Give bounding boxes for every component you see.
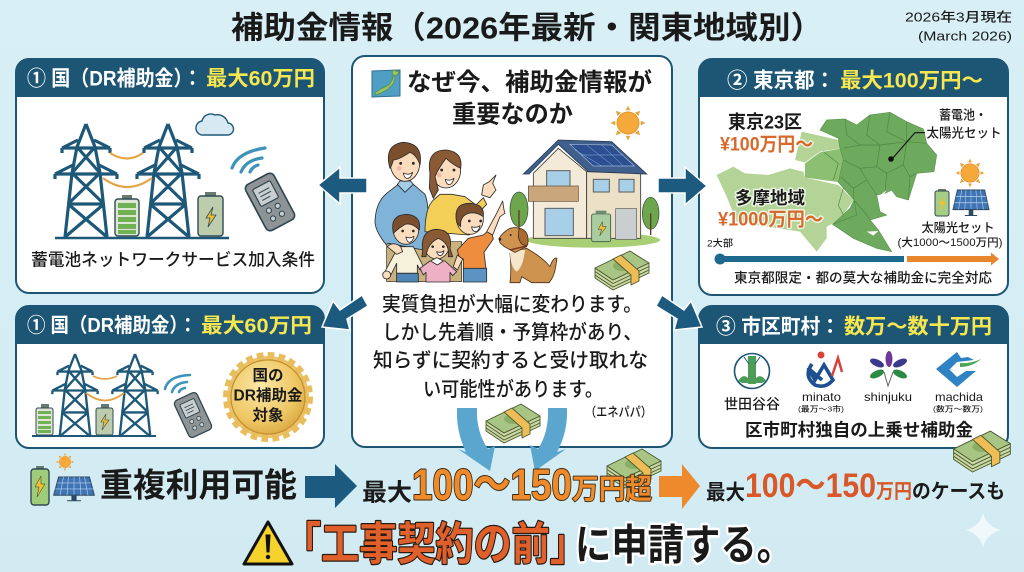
- label: Setagaya: 世田谷谷: [724, 396, 780, 412]
- arrow: center to national top: [318, 167, 367, 204]
- icon: power towers and batteries: [55, 124, 229, 238]
- icon: solar panel: [953, 190, 989, 216]
- text: apply: に申請する。: [575, 522, 793, 568]
- logo: Shinjuku: [869, 351, 908, 386]
- panel: national DR subsidy bottom: [16, 306, 324, 448]
- label: 2 wards: 2大部: [707, 238, 734, 250]
- labels: Tama: ¥1000万円〜: [718, 210, 823, 230]
- figure: mother: [425, 150, 496, 235]
- icon: warning triangle: [244, 522, 292, 564]
- illustration: dog: [499, 228, 557, 283]
- labels: 23 wards: ¥100万円〜: [720, 134, 813, 156]
- map: Tokyo: [717, 112, 937, 252]
- text block: explanation: 実質負担が大幅に変わります。: [382, 293, 642, 316]
- arrow: left curved flow: [457, 408, 495, 471]
- heading: why now: なぜ今、補助金情報が: [407, 68, 652, 96]
- source note: （エネパパ）: [585, 404, 652, 420]
- icon: small towers and batteries: [32, 354, 158, 436]
- text: combined use: 重複利用可能: [100, 466, 297, 504]
- figure: father: [375, 142, 429, 250]
- heading: national bottom: ① 国（DR補助金）：: [27, 314, 197, 337]
- arrow: right curved flow: [530, 408, 567, 471]
- label: Shinjuku: shinjuku: [864, 390, 912, 404]
- badge: gold medal: DR補助金: [234, 386, 303, 404]
- heading: national top: 最大60万円: [206, 68, 315, 90]
- label: Minato: (最万～3市): [798, 404, 845, 414]
- panel: Tokyo: [699, 59, 1008, 295]
- text block: explanation: い可能性があります。: [423, 378, 603, 401]
- figure: older boy front-left: [383, 214, 423, 282]
- logo: Setagaya: [734, 354, 770, 388]
- text: max 100-150 over: 100〜150: [412, 460, 572, 510]
- heading: Tokyo: [727, 70, 983, 92]
- labels: Tama: [718, 188, 823, 230]
- callout: map leader: [892, 133, 925, 159]
- figure: girl: [420, 229, 457, 282]
- heading: national bottom: [27, 314, 312, 338]
- icon: cash between arrows: [486, 404, 540, 443]
- caption: Tokyo: 東京都限定・都の莫大な補助金に完全対応: [734, 270, 993, 286]
- text: cases up to 100-150: 100〜150: [745, 467, 876, 505]
- decoration: sparkle: [966, 513, 1001, 548]
- labels: 23 wards: [720, 112, 813, 156]
- date note: 2026年3月現在: [905, 10, 1012, 24]
- caption: battery network: 蓄電池ネットワークサービス加入条件: [31, 250, 315, 270]
- figure: legs behind: [387, 242, 462, 282]
- label: battery and solar set: 太陽光セット: [926, 126, 1002, 140]
- text: max 100-150 over: 万円超: [572, 474, 652, 504]
- row: combined use: [31, 449, 1005, 510]
- heading: why now: [407, 68, 652, 128]
- labels: Tama: 多摩地域: [735, 188, 805, 208]
- figure: boy pointing: [453, 201, 505, 282]
- icon: battery and solar: [31, 453, 94, 505]
- illustration: family: [375, 142, 505, 282]
- label: Machida: (数万～数万): [933, 404, 984, 414]
- heading: national top: ① 国（DR補助金）：: [27, 68, 202, 90]
- arrow: orange: [659, 464, 700, 509]
- arrow: timeline: [714, 252, 999, 266]
- text: cases up to 100-150: のケースも: [912, 480, 1005, 503]
- heading: why now: 重要なのか: [452, 100, 573, 128]
- label: Minato: [798, 390, 845, 414]
- label: Minato: minato: [802, 390, 841, 404]
- illustration: house: [510, 140, 660, 248]
- badge: gold medal: 国の: [252, 368, 284, 384]
- icon: Japan map: [372, 70, 400, 97]
- arrow: center to Tokyo: [658, 167, 707, 205]
- icon: battery: [935, 189, 949, 216]
- icon: remote controller: [244, 172, 296, 232]
- label: battery and solar set: 蓄電池・: [939, 108, 987, 122]
- badge: gold medal: 対象: [252, 406, 284, 424]
- text block: explanation: [373, 293, 648, 401]
- panel: national DR subsidy top: [16, 59, 324, 293]
- text block: explanation: 知らずに契約すると受け取れな: [373, 349, 648, 372]
- label: battery and solar set: [926, 108, 1002, 140]
- heading: municipalities: 数万〜数十万円: [844, 316, 992, 338]
- icon: small wifi: [165, 375, 190, 392]
- arrow: center to municipalities: [656, 295, 702, 330]
- logo: Minato: [808, 352, 842, 386]
- label: solar set: (大1000〜1500万円): [898, 235, 1002, 249]
- icon: cloud: [196, 114, 234, 135]
- heading: national bottom: 最大60万円: [201, 314, 312, 338]
- text: cases up to 100-150: [706, 467, 1005, 505]
- label: Machida: [933, 390, 984, 414]
- text: max 100-150 over: 最大: [362, 480, 412, 506]
- icon: cash at right: [954, 431, 1010, 472]
- date note: (March 2026): [918, 28, 1012, 44]
- icon: sun: [611, 106, 645, 140]
- label: solar set: [898, 220, 1002, 249]
- heading: Tokyo: 最大100万円〜: [840, 70, 983, 92]
- icon: wifi waves: [232, 148, 265, 172]
- logo: Machida: [936, 352, 981, 387]
- text: max 100-150 over: [362, 460, 652, 510]
- badge: gold medal: [227, 356, 309, 438]
- label: Machida: machida: [935, 390, 983, 404]
- text: before construction contract: 「工事契約の前」: [283, 518, 588, 570]
- date note: [905, 10, 1012, 44]
- caption: municipalities: 区市町村独自の上乗せ補助金: [745, 420, 974, 440]
- icon: small remote: [173, 391, 213, 439]
- labels: 23 wards: 東京23区: [728, 112, 802, 132]
- panel: center why subsidies matter: [352, 56, 672, 447]
- arrow: center to national bottom: [322, 295, 368, 330]
- arrow: dark blue: [305, 464, 357, 508]
- heading: municipalities: [716, 316, 992, 338]
- title: 補助金情報（2026年最新・関東地域別）: [231, 10, 823, 46]
- text: cases up to 100-150: 万円: [876, 481, 912, 503]
- icon: cash on row: [607, 449, 661, 488]
- heading: national top: [27, 68, 315, 90]
- label: solar set: 太陽光セット: [922, 220, 994, 235]
- text: cases up to 100-150: 最大: [706, 482, 745, 504]
- text block: explanation: しかし先着順・予算枠があり、: [382, 321, 642, 344]
- icon: cash on center panel: [595, 251, 649, 290]
- panel: municipalities: [699, 306, 1008, 448]
- icon: sun: [956, 159, 984, 187]
- heading: Tokyo: ② 東京都：: [727, 70, 835, 92]
- heading: municipalities: ③ 市区町村：: [716, 316, 840, 338]
- warning line: [244, 518, 793, 570]
